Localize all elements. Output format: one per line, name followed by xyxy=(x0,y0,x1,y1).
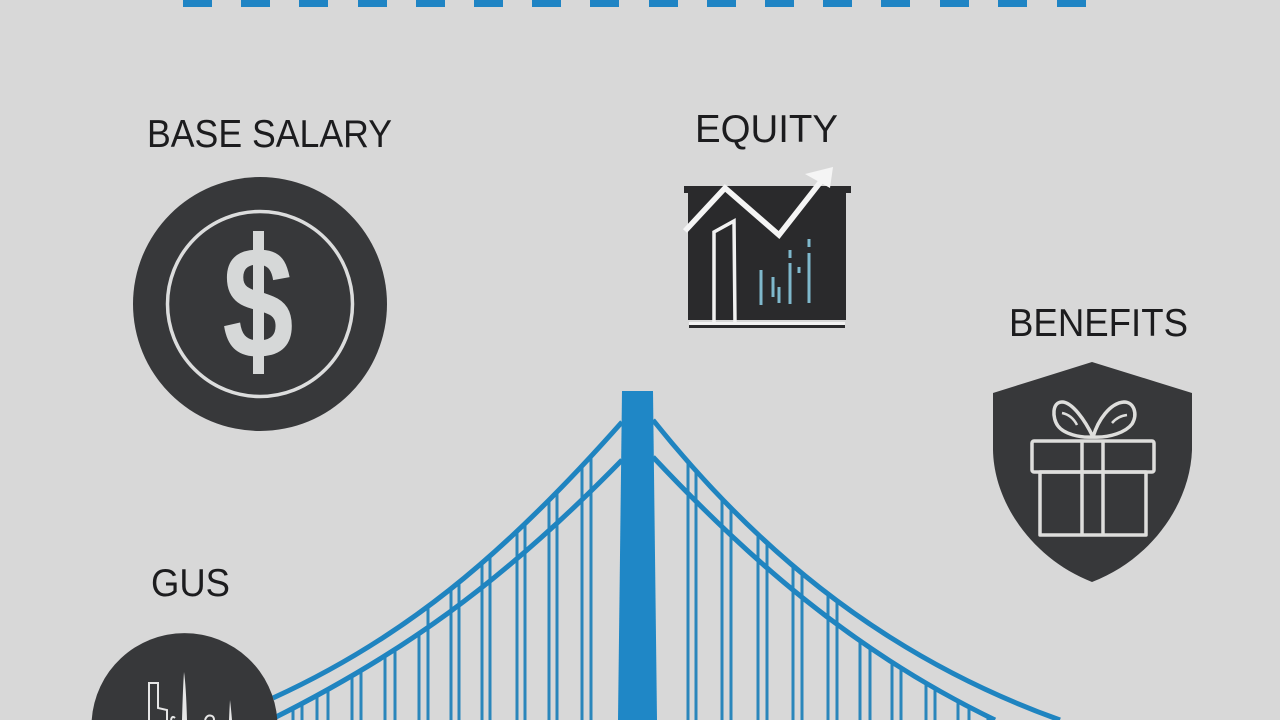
right hangers from upper cable xyxy=(686,464,838,720)
heading: benefits: BENEFITS xyxy=(1009,302,1188,345)
icon: dollar coin: $ xyxy=(222,213,294,392)
bridge tower xyxy=(618,391,657,720)
bridge xyxy=(270,391,1060,720)
icon: dollar coin xyxy=(133,177,387,431)
hangers from lower cable xyxy=(292,636,420,720)
dashed top band xyxy=(183,0,1086,7)
icon: equity chart xyxy=(684,167,851,328)
icon: gift shield xyxy=(993,362,1192,582)
heading: gus: GUS xyxy=(151,562,230,605)
right hangers from lower cable xyxy=(858,642,990,720)
heading: base salary: BASE SALARY xyxy=(147,113,392,156)
icon: skyline circle xyxy=(92,633,277,720)
hangers from upper cable xyxy=(426,458,592,720)
suspension cables xyxy=(270,420,1060,720)
heading: equity: EQUITY xyxy=(695,108,838,151)
